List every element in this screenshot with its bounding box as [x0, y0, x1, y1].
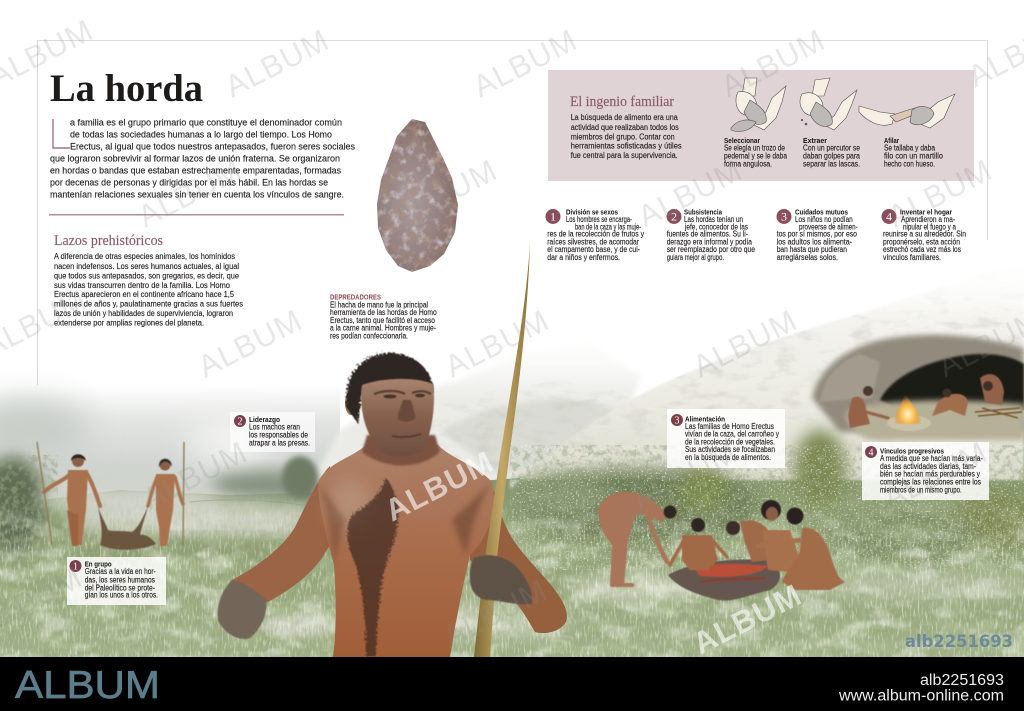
standing figure	[980, 374, 1004, 405]
text: Depredadores	[330, 292, 437, 340]
squatting child	[670, 518, 727, 570]
torso	[318, 445, 494, 657]
column: División se sexos: ban de la caza y las muje-	[575, 222, 641, 232]
figures: left hunters with prey	[37, 442, 184, 550]
column: Inventar el hogar: estrechó cada vez más los	[883, 245, 961, 254]
spear of hunter	[183, 442, 184, 546]
intro paragraph: que lograron sobrevivir al formar lazos de unión fraterna. Se organizaron	[50, 154, 340, 164]
seated man	[758, 508, 845, 590]
callout 1: En grupo: gían los unos a los otros.	[85, 591, 158, 600]
watermarks: ALBUM	[467, 22, 583, 104]
torso shading	[318, 473, 492, 565]
stone hand axe	[377, 119, 458, 272]
caption: Seleccionar: forma angulosa.	[724, 160, 772, 169]
column: Cuidados mutuos: ban hasta que pudieran	[777, 245, 847, 254]
face	[361, 379, 434, 456]
callout 3: Alimentación	[667, 409, 785, 468]
column: División se sexos: Los hombres se encarga-	[566, 215, 632, 224]
body text: A diferencia de otras especies animales, los homínidos	[54, 252, 235, 261]
body text: que todos sus antepasados, son gregarios, es decir, que	[54, 272, 240, 280]
column: Inventar el hogar: Inventar el hogar	[900, 207, 952, 216]
face details	[374, 391, 431, 437]
body text: lazos de unión y habilidades de superviviencia, lograron	[54, 309, 233, 318]
heading: El ingenio familiar	[570, 94, 674, 110]
left dark bushes	[0, 455, 320, 553]
left arm	[226, 466, 336, 604]
panel body: herramientas sofisticadas y útiles	[571, 142, 682, 151]
watermarks: ALBUM	[632, 152, 748, 234]
column: Inventar el hogar	[882, 207, 966, 262]
firewood	[975, 408, 1022, 418]
chest hair	[347, 478, 398, 657]
watermarks: ALBUM	[687, 577, 807, 661]
watermarks: ALBUM	[687, 302, 803, 384]
text: Depredadores: DEPREDADORES	[330, 292, 381, 302]
callout 3: Alimentación: Alimentación	[685, 414, 725, 423]
pale ground patches	[60, 538, 1024, 638]
callout 4: Vínculos progresivos: bién se hacían más perdurables y	[880, 470, 980, 479]
callout 3: Alimentación: Sus actividades se focalizaban	[685, 445, 775, 454]
column: División se sexos	[546, 207, 644, 262]
callout 2: Liderazgo: atrapar a las presas.	[249, 439, 310, 448]
column: Subsistencia: derazgo era informal y podía	[667, 237, 753, 246]
heading: Lazos prehistóricos	[54, 233, 163, 249]
body text: nacen indefensos. Los seres humanos actuales, al igual	[54, 262, 239, 271]
icon: hands extracting flakes	[800, 78, 857, 130]
caption: Seleccionar: Se elegía un trozo de	[724, 144, 785, 153]
caption: Seleccionar	[724, 136, 787, 169]
body text: millones de años y, paulatinamente gracias a sus fuertes	[54, 300, 243, 308]
carcass	[668, 560, 780, 600]
icon: hands selecting stone	[731, 78, 786, 132]
column: División se sexos: 1	[550, 210, 556, 224]
cave	[812, 335, 1024, 440]
intro paragraph: de todas las sociedades humanas a lo largo del tiempo. Los Homo	[70, 130, 332, 140]
group around carcass	[598, 492, 845, 600]
column: División se sexos: dar a niños y enfermos.	[547, 253, 620, 262]
column: Cuidados mutuos: tos por sí mismos, por eso	[777, 230, 858, 239]
column: División se sexos: raíces silvestres, de acomodar	[547, 237, 639, 246]
footer url: www.album-online.com	[838, 688, 1004, 704]
body text: Erectus aparecieron en el continente africano hace 1,5	[54, 290, 235, 299]
spear	[474, 243, 530, 657]
caption: Extraer: Extraer	[803, 136, 827, 145]
woman with long hair	[761, 500, 800, 572]
right arm	[470, 470, 567, 633]
footer id: alb2251693	[920, 672, 1004, 689]
drop cap L	[53, 119, 70, 148]
callout 1: En grupo: das, los seres humanos	[85, 575, 155, 584]
callout 1: En grupo: Gracias a la vida en hor-	[85, 567, 156, 576]
callout 2: Liderazgo: 2	[238, 416, 242, 428]
panel body: La búsqueda de alimento era una	[571, 113, 678, 122]
sky fade over mountains	[466, 345, 636, 387]
illustration: prehistoric landscape	[0, 292, 1024, 657]
watermarks: ALBUM	[219, 22, 335, 104]
caption: Afilar	[884, 136, 944, 169]
callout 4: Vínculos progresivos: miembros de un mismo grupo.	[880, 485, 962, 494]
callout 1: En grupo: del Paleolítico se prote-	[85, 583, 155, 592]
divider	[49, 214, 344, 216]
hill top fade	[922, 266, 1024, 305]
intro paragraph: Erectus, al igual que todos nuestros antepasados, fueron seres sociales	[70, 142, 355, 152]
column: Inventar el hogar: proponérselo, esta acción	[883, 237, 960, 246]
grass texture	[0, 490, 1024, 657]
mid green vegetation	[510, 430, 1024, 570]
callout 3: Alimentación: 3	[674, 416, 680, 426]
watermarks: ALBUM	[132, 152, 248, 234]
text: Depredadores: herramienta de las hordas de Homo	[330, 308, 437, 317]
callout 1: En grupo	[67, 557, 166, 605]
column: Cuidados mutuos: proveerse de alimen-	[799, 222, 858, 232]
section: Lazos prehistóricos	[54, 233, 243, 328]
panel body: actividad que realizaban todos los	[571, 123, 679, 132]
callout 4: Vínculos progresivos: complejas las relaciones entre los	[880, 477, 981, 486]
column: Subsistencia: jefe, conocedor de las	[684, 222, 748, 232]
footer logo: ALBUM	[15, 664, 160, 707]
stick	[37, 442, 52, 545]
caption: Seleccionar: pedernal y se le daba	[724, 152, 787, 161]
callout 3: Alimentación: en la búsqueda de alimentos.	[685, 453, 771, 462]
right hill	[508, 292, 1024, 490]
column: Cuidados mutuos: los adultos los alimenta-	[777, 237, 852, 246]
column: Subsistencia: fuentes de alimentos. Su li-	[667, 230, 748, 239]
column: División se sexos: res de la recolección de frutos y	[547, 230, 644, 239]
watermarks: ALBUM	[627, 434, 743, 516]
man with spear	[218, 243, 567, 657]
column: Subsistencia: 2	[671, 210, 677, 224]
panel body: fue central para la supervivencia.	[571, 151, 678, 160]
column: Subsistencia: Subsistencia	[684, 207, 723, 216]
callout 3: Alimentación: Las familias de Homo Erectus	[685, 422, 774, 431]
body text: extenderse por amplias regiones del planeta.	[54, 318, 204, 328]
callout 4: Vínculos progresivos	[862, 442, 989, 500]
column: Cuidados mutuos	[776, 207, 858, 262]
caption: Extraer	[803, 136, 861, 169]
caption: Afilar: hecho con hueso.	[884, 160, 935, 169]
caption: Afilar: Se tallaba y daba	[884, 144, 936, 153]
fog and distant sky	[0, 385, 340, 510]
column: Subsistencia	[666, 207, 756, 262]
callout 2: Liderazgo: los responsables de	[249, 431, 309, 440]
pale rocky clearing	[40, 486, 320, 540]
caption: Extraer: Con un percutor se	[803, 144, 861, 153]
caption: Extraer: separar las lascas.	[803, 160, 860, 169]
title: La horda	[50, 67, 203, 110]
column: Cuidados mutuos: arreglárselas solos.	[777, 253, 838, 262]
panel body	[571, 113, 682, 160]
watermarks: ALBUM	[437, 572, 553, 654]
hunter left	[44, 454, 100, 546]
ear	[345, 391, 357, 415]
intro paragraph: a familia es el grupo primario que constituye el denominador común	[70, 118, 342, 128]
column: Inventar el hogar: reunirse a su alrededor. Sin	[883, 230, 966, 239]
text: Depredadores: Erectus, tanto que facilitó el acceso	[330, 316, 436, 325]
column: Cuidados mutuos: Cuidados mutuos	[795, 207, 848, 216]
column: Subsistencia: guiara mejor al grupo.	[667, 253, 724, 262]
crouching figure	[932, 388, 968, 416]
callout 3: Alimentación: de la recolección de vegetales.	[685, 437, 775, 446]
column: División se sexos: División se sexos	[566, 207, 618, 216]
body text: sus vidas transcurren dentro de la familia. Los Homo	[54, 281, 231, 290]
ground base	[0, 420, 1024, 657]
callout 4: Vínculos progresivos: A medida que se hacían más varia-	[880, 454, 983, 463]
watermarks: ALBUM	[715, 22, 831, 104]
panel body: miembros del grupo. Contar con	[571, 132, 675, 141]
fire	[895, 392, 921, 424]
caption: Afilar: filo con un martillo	[884, 152, 944, 161]
text: Depredadores: El hacha de mano fue la principal	[330, 300, 428, 309]
text: Depredadores: a la carne animal. Hombres y muje-	[330, 324, 436, 333]
intro paragraph: por decenas de personas y dirigidas por el más hábil. En las hordas se	[50, 178, 328, 188]
column: Inventar el hogar: 4	[886, 210, 892, 224]
intro paragraph	[50, 118, 355, 200]
caption: Afilar: Afilar	[884, 136, 899, 145]
image id stamp: alb2251693	[905, 632, 1013, 652]
right hand	[470, 555, 532, 604]
caption: Extraer: daban golpes para	[803, 152, 861, 161]
footer bar	[0, 657, 1024, 711]
second child	[726, 520, 768, 562]
column: Inventar el hogar: nipular el fuego y a	[903, 222, 956, 232]
column: Cuidados mutuos: Los niños no podían	[795, 215, 853, 224]
callout 4: Vínculos progresivos: Vínculos progresivos	[880, 446, 944, 455]
seated figure	[848, 386, 888, 428]
watermarks: ALBUM	[192, 302, 308, 384]
frame line	[38, 40, 988, 402]
distant mountains	[317, 368, 638, 483]
hunter right	[148, 459, 183, 546]
watermarks: ALBUM	[379, 444, 499, 528]
watermarks: ALBUM	[877, 434, 993, 516]
column: División se sexos: el campamento base, y de cui-	[547, 245, 640, 254]
panel: El ingenio familiar	[548, 70, 974, 181]
watermarks: ALBUM	[387, 152, 503, 234]
callout 1: En grupo: 1	[73, 562, 78, 572]
stone ring	[887, 415, 931, 431]
callout 2: Liderazgo: Liderazgo	[249, 415, 280, 424]
column: Cuidados mutuos: 3	[781, 210, 787, 224]
intro paragraph: mantenían relaciones sexuales sin tener en cuenta los vínculos de sangre.	[50, 190, 344, 200]
icon: hands sharpening with bone	[859, 94, 955, 128]
column: Subsistencia: ser reemplazado por otro que	[667, 245, 756, 254]
text: Depredadores: res podían confeccionarla.	[330, 331, 408, 340]
watermarks: ALBUM	[882, 152, 998, 234]
cave fire and figures	[848, 374, 1022, 431]
column: Inventar el hogar: vínculos familiares.	[883, 253, 941, 262]
column: Inventar el hogar: Aprendieron a ma-	[901, 215, 955, 224]
callout 2: Liderazgo: Los machos eran	[249, 423, 300, 432]
callout 3: Alimentación: vivían de la caza, del carroñeo y	[685, 430, 779, 439]
watermarks: ALBUM	[137, 434, 253, 516]
intro paragraph: en hordas o bandas que estaban estrechamente emparentadas, formadas	[50, 166, 341, 176]
watermarks: ALBUM	[439, 302, 555, 384]
callout 4: Vínculos progresivos: 4	[868, 448, 874, 458]
callout 4: Vínculos progresivos: das las actividades diarias, tam-	[880, 462, 976, 471]
bending woman	[598, 492, 676, 585]
callout 1: En grupo: En grupo	[85, 560, 112, 569]
neck	[362, 435, 440, 466]
prey	[98, 506, 156, 550]
hair	[346, 353, 434, 424]
caption: Seleccionar: Seleccionar	[724, 136, 760, 145]
body text	[54, 252, 243, 328]
column: Subsistencia: Las hordas tenían un	[684, 215, 743, 224]
left hand	[218, 580, 266, 639]
callout 2: Liderazgo	[230, 412, 315, 452]
